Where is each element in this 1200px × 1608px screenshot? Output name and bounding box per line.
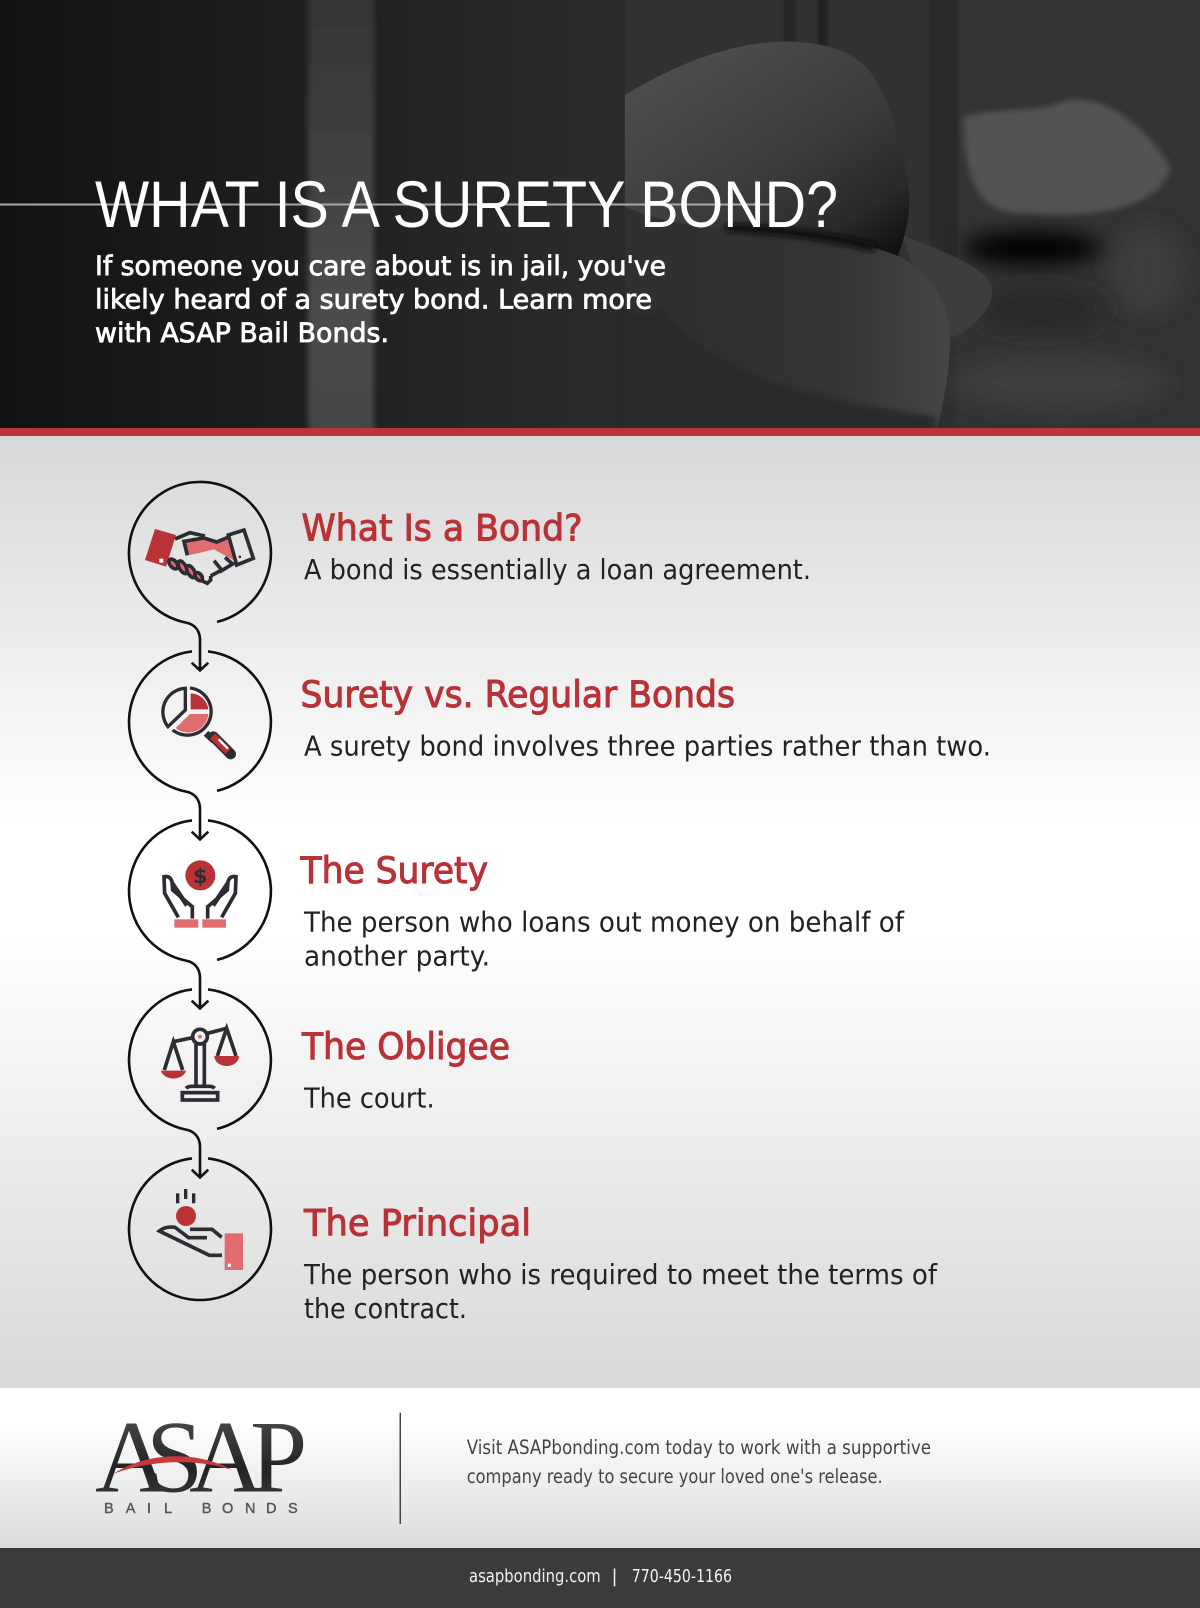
section: the principal: The Principal [303, 1202, 531, 1245]
back finger [902, 235, 992, 337]
footer divider [400, 1413, 401, 1524]
section: surety vs regular bonds: A surety bond involves three parties rather than two. [304, 731, 991, 763]
section: the principal: The person who is required to meet the terms of [303, 1259, 938, 1291]
subtitle [95, 251, 666, 349]
panel: footer call to action background [0, 1388, 1200, 1548]
section: the surety: another party. [304, 941, 490, 973]
contact details [469, 1566, 732, 1587]
icon: hands holding dollar coin: $ [193, 864, 208, 888]
contact bar [0, 1548, 1200, 1608]
lower finger [870, 250, 950, 428]
subtitle: with ASAP Bail Bonds. [95, 318, 389, 349]
section: the obligee: The Obligee [301, 1025, 510, 1068]
section: what is a bond [302, 507, 811, 586]
section: the obligee: The court. [303, 1083, 435, 1115]
section: the surety: The Surety [300, 849, 488, 892]
section: surety vs regular bonds [300, 673, 991, 763]
call to action text: Visit ASAPbonding.com today to work with a supportive [467, 1436, 931, 1459]
section: what is a bond: What Is a Bond? [302, 507, 582, 550]
icon: handshake [145, 529, 253, 583]
section: the obligee [301, 1025, 510, 1115]
fingertip [625, 42, 909, 256]
section: the principal [303, 1202, 938, 1325]
call to action text [467, 1436, 931, 1488]
icon: balance scales [161, 1028, 239, 1100]
icon: hand receiving coin [159, 1189, 243, 1270]
section: the surety: The person who loans out money on behalf of [303, 907, 905, 939]
contact details: 770-450-1166 [632, 1566, 732, 1587]
section: surety vs regular bonds: Surety vs. Regular Bonds [300, 673, 735, 716]
subtitle: If someone you care about is in jail, you've [95, 251, 666, 282]
blurred background hand [964, 99, 1170, 215]
logo: ASAP Bail Bonds: BAILBONDS [104, 1501, 298, 1517]
title: WHAT IS A SURETY BOND? [95, 167, 838, 241]
section: what is a bond: A bond is essentially a loan agreement. [304, 554, 811, 586]
icon: magnifier with pie chart [163, 688, 231, 754]
icon: hands holding dollar coin [164, 860, 236, 928]
hero photo: hand gripping jail bars [0, 0, 1200, 450]
call to action text: company ready to secure your loved one's release. [467, 1465, 883, 1488]
title rule [0, 204, 772, 206]
contact details: | [612, 1566, 618, 1587]
finger fold [720, 362, 938, 428]
subtitle: likely heard of a surety bond. Learn more [95, 284, 652, 316]
red divider band [0, 428, 1200, 436]
section: the principal: the contract. [304, 1293, 467, 1325]
panel: gradient background [0, 436, 1200, 1388]
flow connector: circles and arrows [129, 482, 271, 1300]
section: the surety [300, 849, 905, 973]
contact details: asapbonding.com [469, 1566, 601, 1587]
logo: ASAP Bail Bonds: ASAP [95, 1400, 307, 1514]
